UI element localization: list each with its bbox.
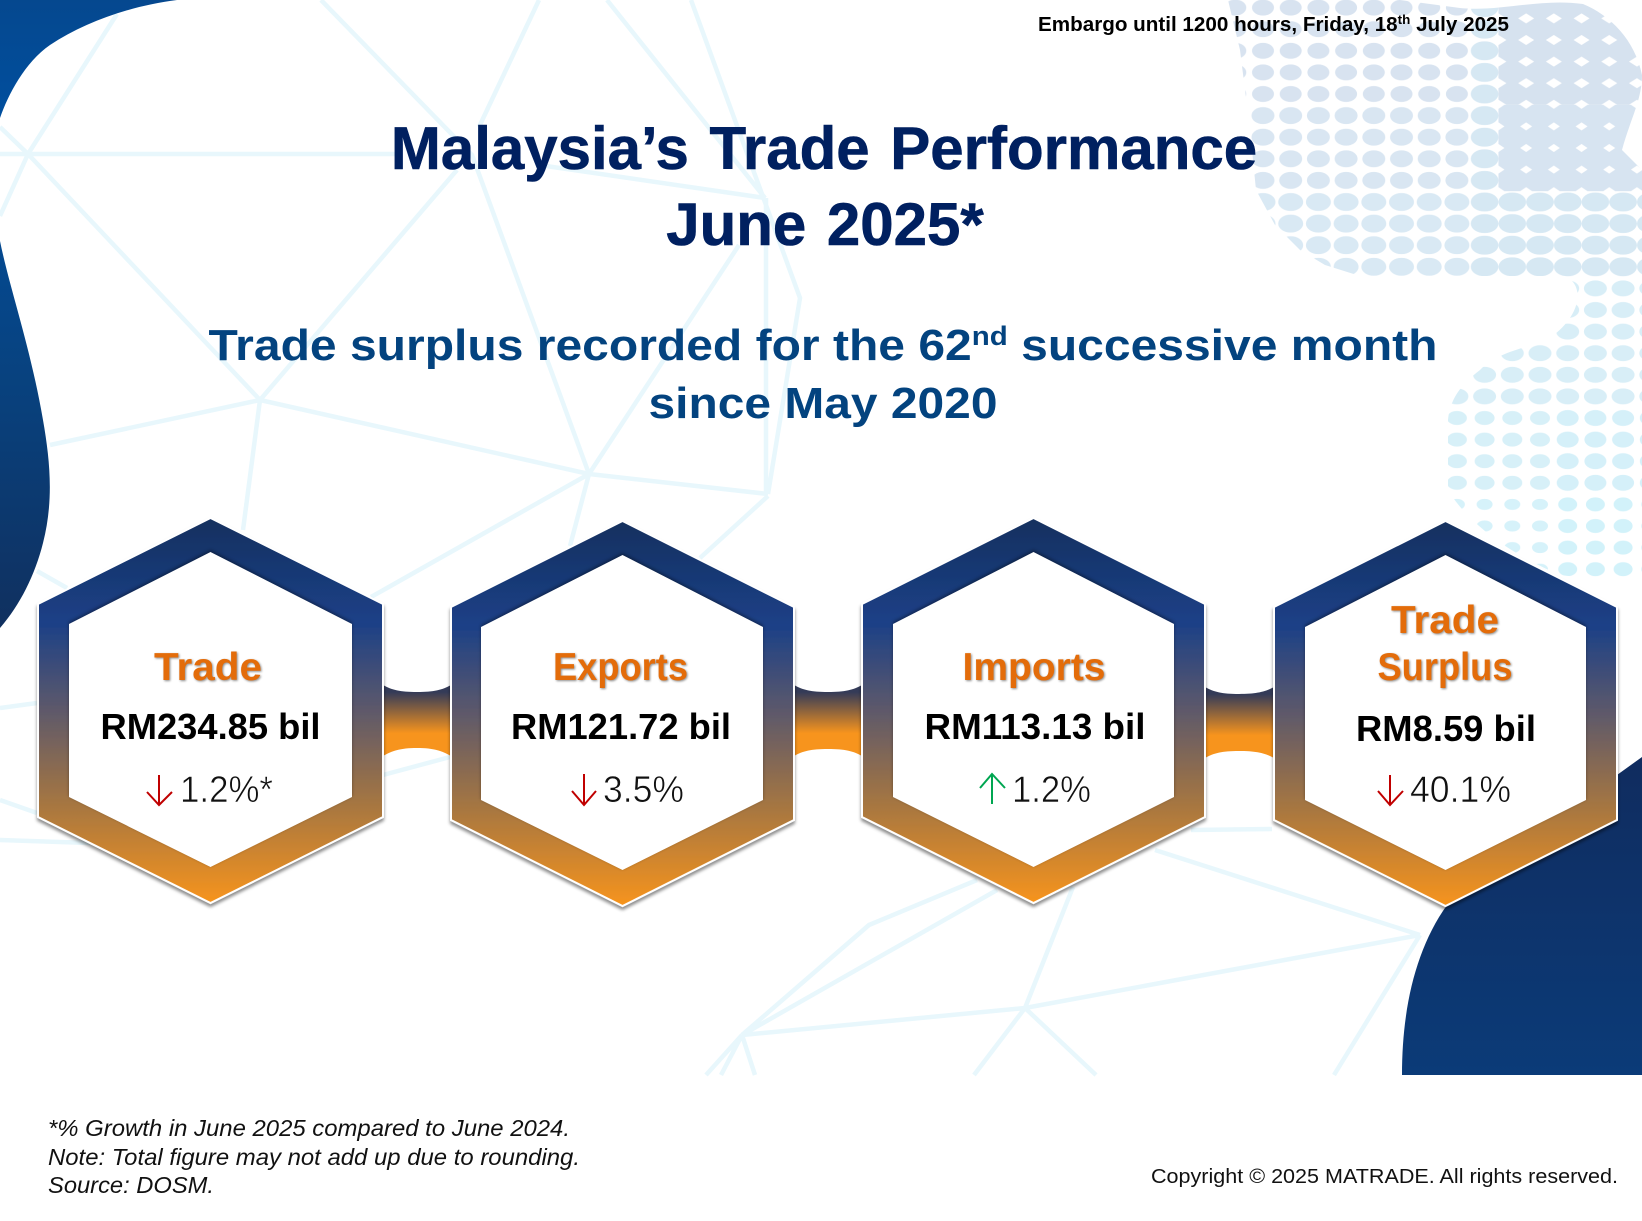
heading: Imports	[962, 646, 1106, 689]
icon: up arrow	[980, 774, 1005, 804]
background network lines	[0, 0, 1420, 1075]
value: RM121.72 bil	[511, 706, 731, 747]
title	[391, 115, 1257, 258]
copyright: Copyright © 2025 MATRADE. All rights reserved.	[1151, 1165, 1618, 1188]
embargo notice: July 2025	[1410, 14, 1509, 36]
icon: down arrow	[1378, 775, 1403, 805]
icon: down arrow	[147, 775, 172, 805]
panel: exports	[451, 521, 794, 906]
icon: down arrow	[572, 774, 596, 805]
footnotes: *% Growth in June 2025 compared to June 2024.	[48, 1115, 570, 1141]
hexagon frame	[862, 518, 1205, 903]
subtitle: since May 2020	[648, 379, 998, 428]
hexagon frame	[451, 521, 794, 906]
change: 3.5%	[603, 769, 684, 810]
bottom-right blue shape	[1402, 757, 1642, 1075]
heading: Surplus	[1378, 646, 1512, 689]
heading	[1378, 599, 1512, 689]
embargo notice: Embargo until 1200 hours, Friday, 18	[1038, 14, 1387, 36]
value: RM8.59 bil	[1356, 708, 1536, 749]
heading: Exports	[553, 646, 688, 689]
subtitle: nd	[972, 321, 1008, 351]
connector: exports to imports	[794, 685, 862, 756]
change: 1.2%	[1012, 769, 1091, 810]
embargo notice: th	[1398, 12, 1410, 27]
top-left corner blue shape	[0, 0, 177, 118]
panel: trade surplus	[1274, 521, 1617, 906]
subtitle: successive month	[1008, 321, 1438, 370]
subtitle	[208, 321, 1438, 428]
panel: trade	[38, 518, 383, 903]
footnotes	[48, 1115, 580, 1198]
footnotes: Note: Total figure may not add up due to rounding.	[48, 1144, 580, 1170]
dotted Malaysia map pattern	[1220, 0, 1642, 602]
change: 40.1%	[1410, 769, 1511, 810]
footnotes: Source: DOSM.	[48, 1172, 214, 1198]
title: June 2025*	[666, 191, 984, 258]
heading: Trade	[154, 646, 262, 689]
connector: imports to trade surplus	[1205, 687, 1274, 758]
left edge blue shape	[0, 241, 50, 628]
panel: imports	[862, 518, 1205, 903]
change: 1.2%*	[180, 769, 273, 810]
hexagon frame	[38, 518, 383, 903]
heading: Trade	[1391, 599, 1499, 642]
subtitle: Trade surplus recorded for the 62	[208, 321, 908, 370]
title: Malaysia’s Trade Performance	[391, 115, 1257, 182]
hexagon frame	[1274, 521, 1617, 906]
connector: trade to exports	[383, 685, 451, 756]
value: RM113.13 bil	[924, 706, 1146, 747]
value: RM234.85 bil	[100, 706, 320, 747]
